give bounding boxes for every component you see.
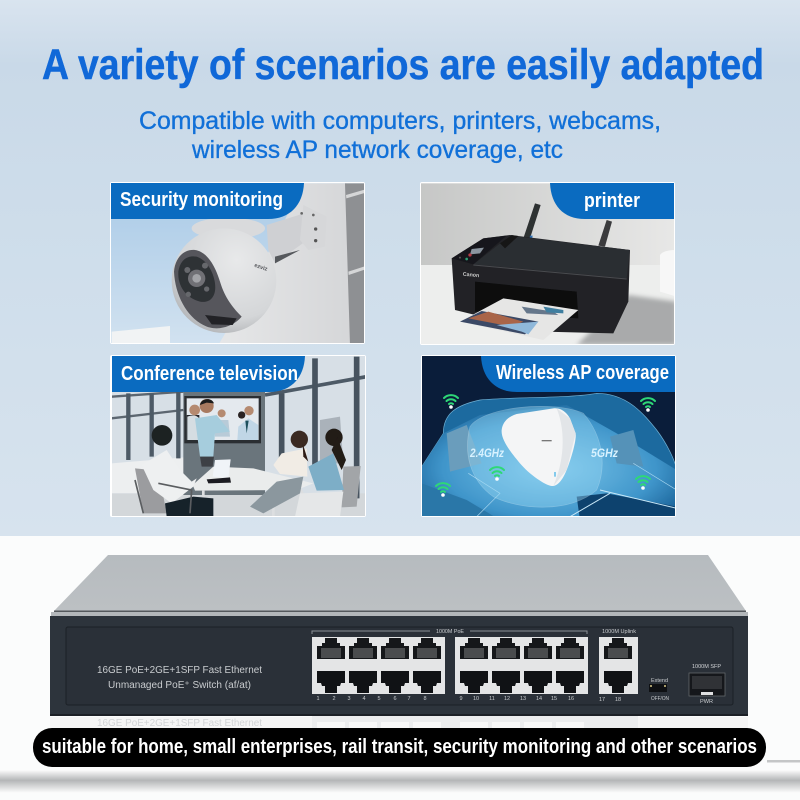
icon: wifi bbox=[641, 398, 655, 411]
port numbers: 8 bbox=[423, 696, 427, 702]
subtitle bbox=[139, 107, 661, 164]
port numbers: 7 bbox=[407, 696, 411, 702]
port numbers: 13 bbox=[520, 696, 526, 702]
icon: wifi bbox=[490, 467, 504, 480]
floor shadow bbox=[0, 770, 800, 793]
label: wireless AP coverage: Wireless AP coverage bbox=[496, 362, 669, 384]
label: security monitoring: Security monitoring bbox=[120, 189, 283, 211]
port numbers: 10 bbox=[473, 696, 479, 702]
port numbers: 12 bbox=[504, 696, 510, 702]
extend switch bbox=[649, 678, 669, 702]
icon: wifi bbox=[444, 395, 458, 408]
panel: security monitoring bbox=[110, 182, 367, 345]
camera photo: ezviz bbox=[253, 263, 268, 273]
network switch product bbox=[50, 555, 748, 716]
label: wireless AP coverage bbox=[481, 356, 675, 392]
label: security monitoring bbox=[111, 183, 304, 219]
icon: wifi bbox=[636, 476, 650, 489]
model text bbox=[97, 665, 262, 691]
ports group 1-8 bbox=[312, 637, 445, 694]
SFP port: PWR bbox=[700, 699, 713, 705]
PoE bracket label bbox=[312, 629, 587, 635]
uplink ports 17-18 bbox=[599, 629, 638, 694]
port numbers: 17 bbox=[599, 697, 605, 703]
SFP port bbox=[689, 664, 725, 705]
extend switch: OFF/ON bbox=[651, 696, 669, 702]
port numbers: 2 bbox=[332, 696, 336, 702]
ports group 9-16 bbox=[455, 637, 588, 694]
switch front panel bbox=[50, 616, 748, 716]
model text: Unmanaged PoE⁺ Switch (af/at) bbox=[108, 680, 251, 691]
conference photo bbox=[110, 355, 367, 518]
port numbers: 9 bbox=[459, 696, 463, 702]
label: conference television bbox=[112, 356, 305, 392]
label: conference television: Conference television bbox=[121, 363, 298, 385]
PoE bracket label: 1000M PoE bbox=[436, 629, 464, 635]
port numbers bbox=[316, 696, 621, 703]
icon: wifi bbox=[436, 483, 450, 496]
extend switch: Extend bbox=[651, 678, 668, 684]
port numbers: 18 bbox=[615, 697, 621, 703]
label: 5GHz: 5GHz bbox=[591, 446, 618, 460]
panel: printer bbox=[420, 182, 677, 347]
switch top surface bbox=[54, 555, 746, 611]
caption pill bbox=[33, 728, 766, 767]
switch reflection: 16GE PoE+2GE+1SFP Fast Ethernet bbox=[97, 718, 262, 729]
port numbers: 15 bbox=[551, 696, 557, 702]
panel: conference television bbox=[110, 355, 367, 518]
panel: wireless AP coverage bbox=[421, 355, 677, 520]
label: 2.4GHz: 2.4GHz bbox=[469, 446, 504, 460]
model text: 16GE PoE+2GE+1SFP Fast Ethernet bbox=[97, 665, 262, 676]
port numbers: 1 bbox=[316, 696, 320, 702]
subtitle: wireless AP network coverage, etc bbox=[191, 136, 563, 164]
printer photo: Canon bbox=[462, 272, 480, 279]
page background bbox=[0, 0, 800, 536]
port numbers: 5 bbox=[377, 696, 381, 702]
subtitle: Compatible with computers, printers, webcams, bbox=[139, 107, 661, 135]
port numbers: 4 bbox=[362, 696, 366, 702]
camera photo bbox=[110, 183, 367, 345]
port numbers: 6 bbox=[393, 696, 397, 702]
uplink ports 17-18: 1000M Uplink bbox=[602, 629, 636, 635]
port numbers: 16 bbox=[568, 696, 574, 702]
AP coverage scene bbox=[422, 356, 677, 520]
port numbers: 3 bbox=[347, 696, 351, 702]
switch reflection bbox=[50, 716, 748, 730]
label: printer: printer bbox=[584, 190, 640, 212]
port numbers: 11 bbox=[489, 696, 495, 702]
SFP port: 1000M SFP bbox=[692, 664, 721, 670]
printer photo bbox=[420, 183, 677, 347]
port numbers: 14 bbox=[536, 696, 542, 702]
label: printer bbox=[550, 183, 674, 219]
